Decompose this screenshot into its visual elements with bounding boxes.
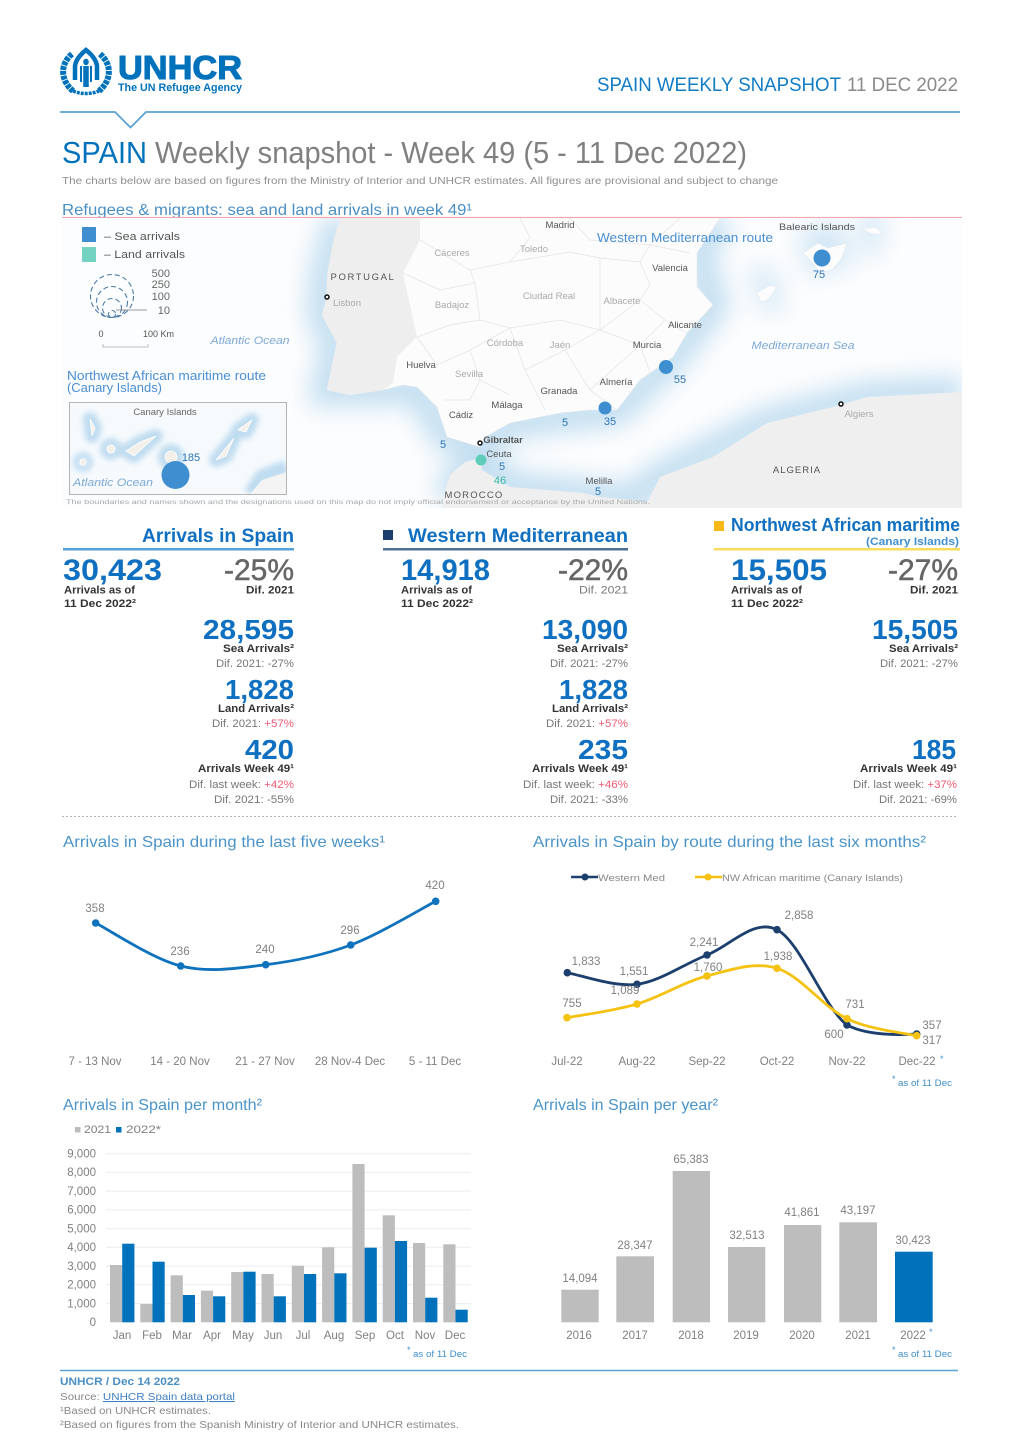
panel: Northwest African maritime: Dif. 2021: -27%: [880, 658, 958, 670]
note: *: [892, 1345, 896, 1355]
legend: bubble size: 10: [158, 305, 170, 317]
axis labels: Oct-22: [760, 1056, 794, 1068]
panel: Arrivals in Spain: Dif. 2021: -55%: [214, 794, 294, 806]
heading: Arrivals in Spain during the last five weeks¹: [63, 834, 385, 851]
panel: Northwest African maritime: Dif. 2021: -69%: [879, 794, 957, 806]
panel: Western Mediterranean: Dif. 2021: -27%: [550, 658, 628, 670]
label: Mediterranean Sea: Mediterranean Sea: [752, 340, 854, 352]
bars: 2021: [110, 1164, 456, 1322]
label: cities and regions: Cádiz: [449, 410, 473, 421]
land: Portugal: [322, 218, 420, 395]
label: Atlantic Ocean: Atlantic Ocean: [209, 335, 290, 347]
heading: Northwest African maritime: [731, 514, 960, 535]
label: cities and regions: Gibraltar: [483, 435, 523, 446]
legend: bubble size: 250: [152, 279, 170, 291]
line: [96, 901, 436, 970]
bubble values: 46: [494, 475, 506, 487]
label: cities and regions: Alicante: [668, 320, 702, 331]
bars: 2022: [122, 1241, 468, 1322]
note: as of 11 Dec: [898, 1349, 953, 1359]
axis labels: 14 - 20 Nov: [150, 1056, 210, 1068]
panel: Western Mediterranean: Land Arrivals²: [552, 703, 628, 715]
sea arrivals: 15,505: [872, 614, 958, 645]
panel: Arrivals in Spain: Arrivals Week 49¹: [198, 763, 294, 775]
x axis: Sep: [355, 1330, 375, 1342]
heading: Arrivals in Spain: [142, 526, 294, 547]
label: cities and regions: Sevilla: [455, 369, 484, 380]
axis labels: [551, 1056, 936, 1068]
label: cities and regions: PORTUGAL: [331, 272, 395, 283]
bubble values: 5: [562, 417, 568, 429]
x axis: Jul: [296, 1330, 310, 1342]
line: Western Med: [567, 927, 917, 1035]
panel: Arrivals in Spain: [63, 526, 294, 806]
footer: UNHCR / Dec 14 2022: [60, 1376, 180, 1388]
label: cities and regions: [331, 220, 874, 501]
y axis: 0: [90, 1317, 96, 1329]
header label: 11 DEC 2022: [847, 75, 958, 96]
axis labels: Sep-22: [688, 1056, 726, 1068]
panel: Western Mediterranean: Dif. 2021: +57%: [546, 718, 628, 730]
y axis: 9,000: [67, 1148, 96, 1160]
label: cities and regions: Toledo: [520, 244, 548, 255]
total: 15,505: [731, 554, 827, 587]
label: cities and regions: Albacete: [604, 296, 640, 307]
axis labels: Aug-22: [618, 1056, 656, 1068]
axis labels: 2022: [900, 1330, 926, 1342]
value labels: 1,938: [764, 951, 792, 963]
chart: arrivals by route: [533, 834, 953, 1088]
value labels: [85, 880, 445, 958]
axis labels: 28 Nov-4 Dec: [315, 1056, 385, 1068]
markers: NW African maritime: [563, 964, 920, 1039]
label: cities and regions: Badajoz: [435, 300, 469, 311]
label: cities and regions: Melilla: [586, 476, 613, 487]
label: cities and regions: Ceuta: [486, 449, 512, 460]
value labels: 600: [824, 1029, 844, 1041]
value labels: 2,241: [690, 937, 718, 949]
label: Western Mediterranean route: Western Mediterranean route: [597, 231, 773, 245]
x axis: Jun: [264, 1330, 282, 1342]
panel: Arrivals in Spain: Dif. 2021: -27%: [216, 658, 294, 670]
line: NW African maritime: [567, 966, 917, 1036]
axis labels: [566, 1330, 926, 1342]
bubble values: 5: [440, 439, 446, 451]
panel: Northwest African maritime: Dif. last week: +37%: [853, 779, 957, 791]
y axis: 3,000: [67, 1261, 96, 1273]
label: cities and regions: Lisbon: [333, 298, 361, 309]
panel: Western Mediterranean: -22%: [558, 554, 628, 587]
panel: Northwest African maritime: Dif. 2021: [910, 584, 958, 596]
axis labels: 21 - 27 Nov: [235, 1056, 295, 1068]
axis labels: 5 - 11 Dec: [409, 1056, 461, 1068]
legend: bubble size: [90, 268, 170, 318]
label: Northwest African maritime route: [67, 369, 266, 395]
value labels: 296: [340, 925, 360, 937]
subtitle: The charts below are based on figures from the Ministry of Interior and UNHCR estimates. All figures are provisional and subject to change: [62, 175, 778, 187]
x axis: Jan: [113, 1330, 131, 1342]
value labels: 14,094: [562, 1273, 598, 1285]
legend: arrival type: – Land arrivals: [104, 249, 186, 261]
note: *: [407, 1345, 411, 1355]
y axis: 4,000: [67, 1242, 96, 1254]
bubble values: 5: [499, 461, 505, 473]
bar: 2022: [895, 1252, 933, 1322]
legend: [75, 1124, 162, 1136]
label: cities and regions: ALGERIA: [773, 465, 821, 476]
map heading: Refugees & migrants: sea and land arrivals in week 49¹: [62, 202, 472, 219]
land arrivals: 1,828: [225, 674, 294, 705]
map credit: The boundaries and names shown and the designations used on this map do not imply official endorsement or acceptance by the United Nations.: [66, 499, 650, 506]
label: cities and regions: Algiers: [844, 409, 874, 420]
footer: ²Based on figures from the Spanish Ministry of Interior and UNHCR estimates.: [60, 1419, 459, 1431]
value labels: [562, 1154, 931, 1285]
panel: Arrivals in Spain: -25%: [224, 554, 294, 587]
scale bar: 0: [98, 329, 104, 339]
bubble values: [440, 269, 825, 498]
city markers: [325, 295, 843, 445]
axis labels: Nov-22: [828, 1056, 866, 1068]
panel: Northwest African maritime: [714, 514, 960, 806]
label: cities and regions: Jaén: [550, 340, 570, 351]
axis labels: 2018: [678, 1330, 704, 1342]
bubble values: 35: [604, 416, 616, 428]
x axis: Apr: [203, 1330, 221, 1342]
wordmark: UNHCR: [118, 49, 242, 86]
x axis: May: [232, 1330, 254, 1342]
legend: Western Med: [598, 873, 665, 884]
bubbles: sea arrivals: [598, 250, 830, 414]
markers: Western Med: [564, 926, 920, 1038]
bubble: land arrivals Ceuta: [476, 454, 486, 466]
value labels: 240: [255, 944, 275, 956]
header label: [597, 75, 958, 96]
value labels: 41,861: [784, 1207, 820, 1219]
label: cities and regions: Cáceres: [434, 248, 470, 259]
panel: Arrivals in Spain: Dif. 2021: +57%: [212, 718, 294, 730]
value labels: 32,513: [729, 1230, 765, 1242]
weekly arrivals: 235: [578, 734, 628, 765]
panel: Western Mediterranean: Dif. last week: +46%: [523, 779, 628, 791]
province boundaries: [403, 218, 690, 410]
panel: map of arrivals: [62, 218, 962, 510]
x axis: Aug: [324, 1330, 344, 1342]
header label: SPAIN WEEKLY SNAPSHOT: [597, 75, 841, 96]
panel: Arrivals in Spain: Land Arrivals²: [218, 703, 294, 715]
scale bar: 100 Km: [143, 329, 174, 339]
bubble values: 5: [595, 486, 601, 498]
heading: Arrivals in Spain per year²: [533, 1097, 719, 1114]
weekly arrivals: 185: [912, 734, 956, 765]
panel: Arrivals in Spain: Dif. last week: +42%: [189, 779, 294, 791]
value labels: 30,423: [895, 1235, 931, 1247]
inset: Canary Islands: Canary Islands: [133, 407, 197, 418]
x axis: Dec: [445, 1330, 465, 1342]
land: Iberia: [322, 218, 720, 447]
total: 30,423: [63, 554, 162, 587]
note: [407, 1345, 468, 1359]
sea arrivals: 13,090: [542, 614, 628, 645]
logo: UNHCR: [63, 49, 243, 94]
land: Balearic Islands: [757, 227, 882, 302]
land: Morocco and Algeria: [443, 392, 962, 510]
footer: [60, 1376, 459, 1431]
panel: Arrivals in Spain: 11 Dec 2022²: [64, 598, 136, 610]
title: Weekly snapshot - Week 49 (5 - 11 Dec 2022): [155, 135, 747, 170]
icon: UNHCR wreath and sheltering hands: [63, 50, 109, 94]
value labels: 420: [425, 880, 445, 892]
label: cities and regions: Granada: [541, 386, 578, 397]
bubble values: 75: [813, 269, 825, 281]
x axis: Nov: [415, 1330, 435, 1342]
axis labels: Dec-22: [898, 1056, 936, 1068]
axis labels: 7 - 13 Nov: [68, 1056, 122, 1068]
value labels: 28,347: [617, 1240, 653, 1252]
axis labels: 2016: [566, 1330, 592, 1342]
axis labels: 2021: [845, 1330, 871, 1342]
heading: Arrivals in Spain by route during the last six months²: [533, 834, 927, 851]
label: cities and regions: MOROCCO: [444, 490, 504, 501]
land arrivals: 1,828: [559, 674, 628, 705]
panel: Arrivals in Spain: Arrivals as of: [64, 584, 135, 596]
legend: 2022*: [126, 1124, 162, 1136]
panel: Western Mediterranean: Arrivals as of: [401, 584, 472, 596]
bars: previous years: [561, 1171, 877, 1322]
label: cities and regions: Valencia: [652, 263, 689, 274]
y axis: 2,000: [67, 1280, 96, 1292]
axis labels: 2017: [622, 1330, 648, 1342]
value labels: 317: [922, 1035, 942, 1047]
tagline: The UN Refugee Agency: [118, 82, 243, 94]
panel: Western Mediterranean: 11 Dec 2022²: [401, 598, 473, 610]
panel: Northwest African maritime: Sea Arrivals²: [889, 643, 958, 655]
value labels: 1,551: [620, 966, 648, 978]
value labels: 731: [845, 999, 865, 1011]
inset: Canary Islands: 185: [182, 452, 200, 464]
y axis: 8,000: [67, 1167, 96, 1179]
note: *: [892, 1074, 896, 1084]
legend: arrival type: [82, 227, 186, 262]
icon: navy square: [383, 530, 393, 540]
label: Northwest African maritime route: (Canary Islands): [67, 381, 162, 395]
label: cities and regions: Ciudad Real: [523, 291, 575, 302]
value labels: [562, 910, 942, 1047]
chart: arrivals last five weeks: [63, 834, 461, 1068]
label: cities and regions: Córdoba: [487, 338, 524, 349]
value labels: 43,197: [840, 1205, 876, 1217]
sea glow along the coasts: [322, 218, 962, 500]
heading: Arrivals in Spain per month²: [63, 1097, 263, 1114]
label: Northwest African maritime route: Northwest African maritime route: [67, 369, 266, 383]
axis labels: 2020: [789, 1330, 815, 1342]
footer: ¹Based on UNHCR estimates.: [60, 1405, 211, 1417]
value labels: 236: [170, 946, 190, 958]
x axis: Feb: [142, 1330, 162, 1342]
chart: arrivals per year: [533, 1097, 953, 1359]
note: as of 11 Dec: [898, 1078, 953, 1088]
label: cities and regions: Madrid: [545, 220, 575, 231]
value labels: 755: [562, 998, 582, 1010]
note: *: [940, 1054, 944, 1064]
x axis: [113, 1330, 465, 1342]
axis labels: [68, 1056, 461, 1068]
heading: Western Mediterranean: [408, 526, 628, 547]
panel: Northwest African maritime: Arrivals Week 49¹: [860, 763, 957, 775]
y axis: 5,000: [67, 1223, 96, 1235]
y axis: [67, 1148, 96, 1329]
inset: Canary Islands: [70, 402, 287, 494]
legend: bubble size: 500: [152, 268, 170, 280]
axis labels: 2019: [733, 1330, 759, 1342]
panel: Arrivals in Spain: Sea Arrivals²: [223, 643, 294, 655]
y axis: 6,000: [67, 1205, 96, 1217]
y axis: 1,000: [67, 1298, 96, 1310]
panel: Northwest African maritime: (Canary Islands): [866, 536, 959, 548]
value labels: 2,858: [785, 910, 813, 922]
value labels: 1,833: [572, 956, 600, 968]
bubble values: 55: [674, 374, 686, 386]
title: SPAIN: [62, 135, 147, 170]
y axis: 7,000: [67, 1186, 96, 1198]
value labels: 358: [85, 903, 105, 915]
panel: Western Mediterranean: Sea Arrivals²: [557, 643, 628, 655]
panel: Northwest African maritime: 11 Dec 2022²: [731, 598, 803, 610]
legend: arrival type: – Sea arrivals: [104, 231, 181, 243]
icon: yellow square: [714, 521, 724, 531]
legend: bubble size: 100: [152, 291, 170, 303]
panel: Western Mediterranean: Arrivals Week 49¹: [532, 763, 628, 775]
panel: Western Mediterranean: Dif. 2021: -33%: [550, 794, 628, 806]
note: as of 11 Dec: [413, 1349, 468, 1359]
value labels: 1,760: [694, 962, 722, 974]
scale bar: [98, 329, 174, 347]
label: cities and regions: Huelva: [406, 360, 436, 371]
legend: [571, 873, 903, 884]
label: cities and regions: Almería: [600, 377, 633, 388]
legend: NW African maritime (Canary Islands): [722, 873, 903, 884]
inset: Canary Islands: Atlantic Ocean: [72, 477, 153, 489]
footer: Source: UNHCR Spain data portal: [60, 1391, 235, 1403]
weekly arrivals: 420: [245, 734, 294, 765]
legend: 2021: [84, 1124, 111, 1136]
panel: Western Mediterranean: [383, 526, 628, 806]
chart: arrivals per month: [63, 1097, 471, 1359]
label: cities and regions: Balearic Islands: [779, 222, 855, 233]
value labels: 65,383: [673, 1154, 709, 1166]
note: [892, 1327, 953, 1359]
panel: Northwest African maritime: -27%: [888, 554, 958, 587]
x axis: Oct: [386, 1330, 405, 1342]
panel: Western Mediterranean: Dif. 2021: [579, 584, 628, 596]
panel: Arrivals in Spain: Dif. 2021: [246, 584, 294, 596]
sea arrivals: 28,595: [203, 614, 294, 645]
value labels: 1,089: [611, 985, 639, 997]
axis labels: Jul-22: [551, 1056, 583, 1068]
header rule with notch: [60, 112, 960, 128]
label: cities and regions: Murcia: [633, 340, 662, 351]
x axis: Mar: [172, 1330, 192, 1342]
label: cities and regions: Málaga: [491, 400, 523, 411]
note: [892, 1054, 953, 1088]
value labels: 357: [922, 1020, 942, 1032]
note: *: [929, 1327, 933, 1337]
panel: Northwest African maritime: Arrivals as of: [731, 584, 802, 596]
total: 14,918: [401, 554, 490, 587]
